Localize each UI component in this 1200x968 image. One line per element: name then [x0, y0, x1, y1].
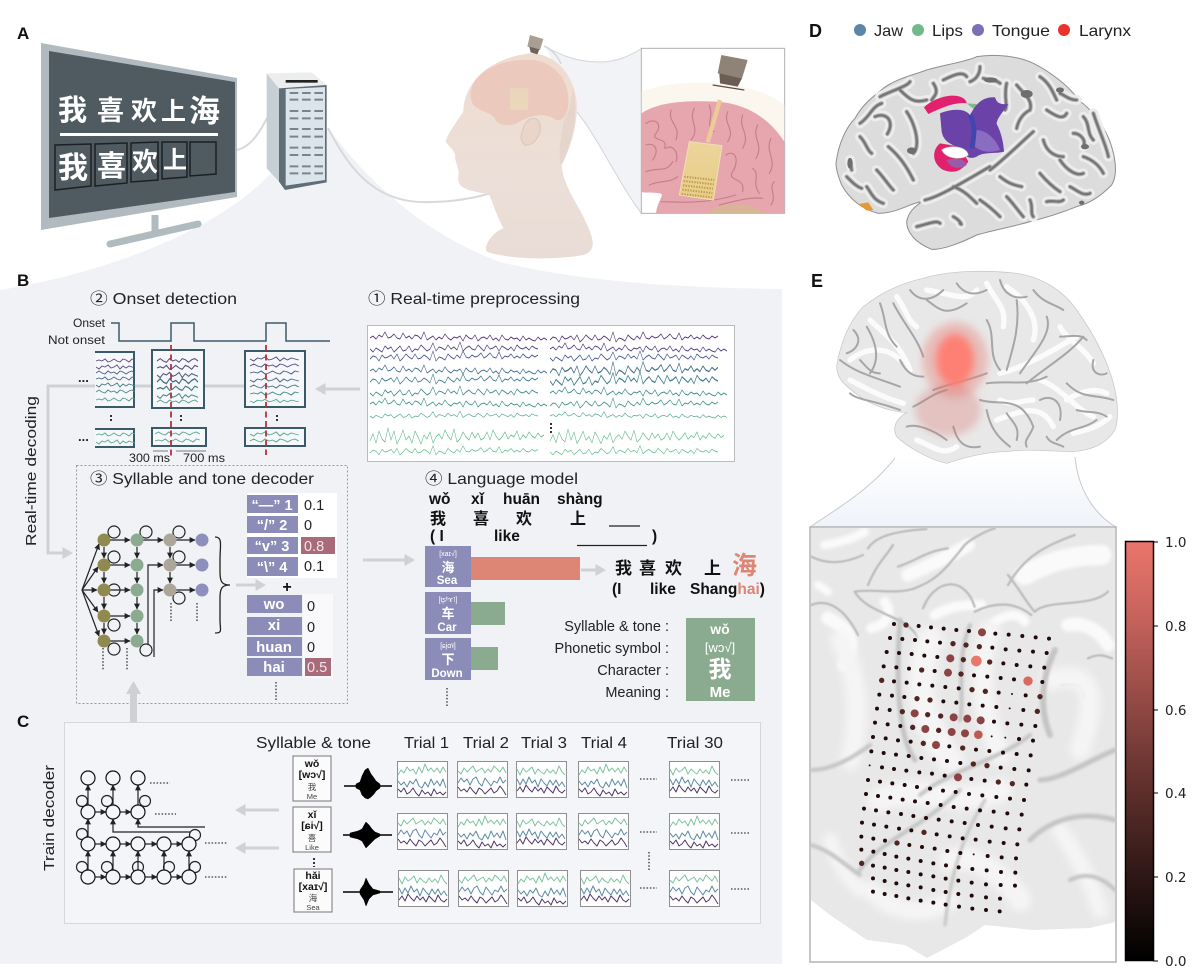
output translation: Shang — [690, 581, 737, 598]
zoomed electrode map — [810, 527, 1116, 962]
icon: signal processing rack — [267, 72, 327, 190]
candidate cards — [425, 546, 471, 680]
syllable probability table: 0 — [307, 620, 315, 636]
translation context: ( I — [430, 528, 444, 545]
jaw spot — [858, 202, 873, 211]
implant patch — [510, 88, 528, 110]
syllable cards: Sea — [306, 903, 320, 912]
trial headings: Trial 30 — [667, 735, 723, 752]
ellipsis marks: ... — [78, 370, 89, 385]
output sentence: 喜 — [639, 558, 656, 578]
candidate cards: Car — [437, 622, 457, 634]
heading: onset detection: ② Onset detection — [90, 290, 237, 308]
section: real-time preprocessing — [368, 290, 734, 462]
decoded sentence: 上 — [163, 147, 187, 174]
neural traces chart — [368, 326, 734, 462]
legend: articulators — [854, 23, 1131, 40]
ellipsis marks — [78, 370, 89, 444]
syllable cards: 海 — [309, 893, 318, 903]
funnel edges — [810, 457, 1116, 527]
tone probability table: “/” 2 — [257, 518, 287, 534]
window 1 — [95, 352, 135, 407]
character context: 喜 — [473, 509, 489, 528]
syllable cards: Like — [305, 843, 319, 852]
rotated label: train decoder: Train decoder — [41, 765, 58, 871]
legend: articulators: Tongue — [992, 23, 1050, 40]
tiny electrodes — [870, 694, 1012, 854]
syllable probability table: xi — [268, 617, 280, 634]
output sentence: 欢 — [665, 559, 682, 578]
label A: A — [17, 24, 29, 43]
heading: language model: ④ Language model — [425, 470, 578, 488]
pinyin context: wǒ — [428, 491, 451, 508]
syllable cards: hǎi — [305, 870, 321, 882]
colorbar: 0.6 — [1165, 703, 1186, 719]
tongue region — [940, 97, 1008, 158]
brain E: high-gamma activation — [837, 271, 1117, 463]
activation glow — [915, 322, 988, 436]
legend card: [wɔ√] — [705, 640, 735, 655]
window 3 — [245, 351, 305, 407]
lower surface highlights — [830, 630, 1100, 911]
recurrent network — [82, 526, 208, 670]
audio waveforms — [343, 768, 393, 906]
colorbar: 1.0 — [1165, 535, 1186, 551]
training network — [76, 771, 228, 884]
upper surface folds and highlights — [811, 528, 1112, 698]
target sentence: 上 — [161, 98, 186, 126]
syllable cards — [293, 756, 332, 912]
arrow: to output — [581, 568, 603, 572]
peak electrodes — [960, 645, 992, 677]
trial ellipsis — [640, 779, 749, 889]
heading: syllable and tone: Syllable & tone — [256, 735, 371, 752]
legend: articulators: Jaw — [874, 23, 903, 40]
onset labels — [48, 316, 106, 347]
icon: head with implanted electrode array — [446, 35, 593, 258]
window timing — [129, 451, 225, 465]
ellipsis marks: ... — [78, 429, 89, 444]
heading: decoder: ③ Syllable and tone decoder — [90, 470, 315, 488]
onset labels: Onset — [73, 316, 106, 330]
colorbar — [1126, 535, 1186, 968]
candidate cards: Down — [431, 668, 463, 680]
syllable probability table — [247, 594, 333, 700]
output translation: (I — [612, 581, 621, 598]
highlights — [850, 283, 1110, 451]
target sentence: 喜 — [97, 96, 124, 126]
blanks — [577, 526, 647, 546]
head shading — [560, 88, 575, 165]
sulcus soft edges — [847, 67, 1108, 227]
candidate cards: [xaɪ√] — [439, 550, 457, 558]
electrode dots — [861, 624, 1049, 911]
arrow: data into network lower — [238, 846, 279, 850]
candidate probability bars — [471, 557, 580, 670]
rotated label: real-time decoding: Real-time decoding — [23, 396, 40, 546]
sulcus lines — [847, 67, 1108, 227]
cortical surface — [811, 528, 1115, 958]
output sentence: 海 — [732, 552, 757, 580]
arrow: train decoder to real-time decoder — [126, 681, 141, 737]
legend: articulators: Larynx — [1079, 23, 1131, 40]
window timing: 700 ms — [183, 453, 225, 465]
decoded sentence: 欢 — [132, 147, 158, 177]
tone probability table — [247, 493, 337, 578]
trial neural plots — [398, 762, 720, 906]
syllable cards: [ɕi√] — [301, 820, 323, 832]
legend card: 我 — [708, 656, 732, 682]
syllable probability table: huan — [256, 639, 292, 656]
syllable probability table: 0 — [307, 599, 315, 615]
inset: brain with ECoG array — [641, 48, 785, 213]
arrow: network to outputs — [236, 584, 263, 586]
label E: E — [811, 271, 823, 291]
output sentence: 上 — [704, 559, 721, 578]
legend labels: Phonetic symbol : — [555, 641, 669, 657]
character context: 我 — [430, 510, 446, 528]
gyrus highlights — [847, 67, 1108, 227]
legend card — [686, 618, 755, 701]
arrow: decoder to language model — [363, 558, 412, 562]
colorbar: 0.2 — [1165, 870, 1186, 886]
trial headings: Trial 4 — [581, 735, 627, 752]
trial headings — [404, 735, 723, 752]
syllable cards: wǒ — [304, 758, 319, 770]
pinyin context: xǐ — [471, 491, 485, 508]
syllable cards: 我 — [308, 782, 317, 792]
panel background: funnel into panels B and C — [0, 128, 782, 964]
connector — [527, 35, 543, 54]
candidate cards: Sea — [437, 575, 458, 587]
lower surface folds — [811, 620, 1115, 925]
window 2 — [152, 350, 204, 408]
inset funnel edges — [545, 46, 642, 214]
wire: connector to skull — [544, 46, 561, 64]
arrow: preprocessing to onset — [318, 388, 360, 390]
pinyin context: huān — [503, 491, 540, 508]
sulci — [840, 280, 1113, 447]
onset step trace — [111, 323, 330, 341]
tone probability table: “\” 4 — [257, 560, 287, 576]
trial headings: Trial 3 — [521, 735, 567, 752]
trial headings: Trial 1 — [404, 735, 449, 752]
pinyin context: shàng — [557, 491, 603, 508]
syllable cards: [wɔ√] — [299, 769, 325, 781]
syllable probability table: 0 — [307, 640, 315, 656]
onset labels: Not onset — [48, 333, 106, 347]
legend labels: Character : — [597, 663, 669, 679]
tone probability table: 0.1 — [304, 498, 324, 514]
tone probability table: 0 — [304, 518, 312, 534]
colorbar: 0.8 — [1165, 619, 1186, 635]
gray flow line — [48, 386, 245, 553]
funnel to zoomed electrode view — [810, 457, 1116, 527]
larynx region — [924, 96, 967, 114]
candidate cards: 下 — [441, 652, 455, 667]
moderate response electrodes — [862, 625, 1040, 863]
decoded character boxes — [55, 142, 216, 190]
strong response electrodes — [915, 632, 982, 777]
small windows — [95, 428, 305, 447]
legend card: wǒ — [709, 621, 730, 637]
decoded sentence: 我 — [58, 152, 88, 185]
decoded sentence: 喜 — [97, 150, 126, 183]
tone probability table: 0.1 — [304, 559, 324, 575]
trial headings: Trial 2 — [463, 735, 509, 752]
output translation: hai) — [737, 581, 765, 598]
panel C: train decoder — [41, 722, 760, 924]
legend card: Me — [710, 684, 730, 701]
candidate cards: 海 — [441, 560, 455, 575]
translation context: like — [494, 528, 520, 545]
syllable cards: 喜 — [308, 833, 317, 843]
label D: D — [809, 21, 822, 41]
heading: preprocessing: ① Real-time preprocessing — [368, 290, 580, 308]
tone probability table: 0.8 — [304, 539, 324, 555]
vertical ellipsis — [111, 415, 277, 423]
candidate cards: [tʂʰɤ˥] — [438, 597, 458, 604]
section: syllable and tone decoder — [76, 466, 348, 704]
output sentence: 我 — [615, 559, 632, 578]
character context: 欢 — [516, 510, 532, 528]
character context: 上 — [570, 510, 586, 528]
output translation: like — [650, 581, 676, 598]
arrow: data into network upper — [238, 808, 279, 812]
syllable cards: Me — [307, 792, 317, 801]
candidate cards: [ɕjɑ˥˩] — [440, 643, 456, 650]
wire: monitor to rack — [236, 118, 267, 150]
label B: B — [17, 271, 29, 290]
brace — [215, 537, 230, 633]
translation context: ) — [652, 528, 657, 545]
sulcal pits — [847, 77, 1089, 205]
syllable cards: [xaɪ√] — [299, 881, 327, 893]
plus sign: + — [282, 579, 292, 596]
low response electrodes — [861, 624, 1049, 911]
syllable probability table: wo — [263, 596, 284, 613]
colorbar: 0.4 — [1165, 786, 1186, 802]
section: language model — [425, 470, 765, 706]
target sentence: 我 — [58, 94, 87, 127]
window timing: 300 ms — [129, 453, 170, 465]
target sentence: 欢 — [131, 96, 157, 126]
syllable probability table: 0.5 — [307, 660, 327, 676]
red onset markers — [171, 345, 266, 456]
legend labels: Syllable & tone : — [564, 619, 669, 635]
wire: rack to head — [328, 128, 495, 202]
label C: C — [17, 712, 29, 731]
brain D: articulator map — [836, 55, 1115, 249]
legend labels: Meaning : — [605, 685, 669, 701]
lower mixed region — [947, 159, 967, 168]
tone probability table: “—” 1 — [251, 498, 293, 514]
ear — [521, 118, 540, 145]
icon: monitor with decoded sentence — [41, 43, 237, 244]
legend labels — [555, 619, 669, 701]
syllable probability table: hai — [263, 659, 285, 676]
lips region — [967, 103, 977, 110]
tone probability table: “v” 3 — [255, 539, 289, 555]
translucent brain in head — [471, 60, 568, 125]
candidate cards: 车 — [441, 606, 455, 621]
target sentence: 海 — [189, 94, 220, 129]
syllable cards: xǐ — [308, 809, 317, 821]
section: onset detection — [48, 290, 360, 553]
legend: articulators: Lips — [932, 23, 963, 40]
inset funnel from head to brain view — [545, 46, 642, 214]
